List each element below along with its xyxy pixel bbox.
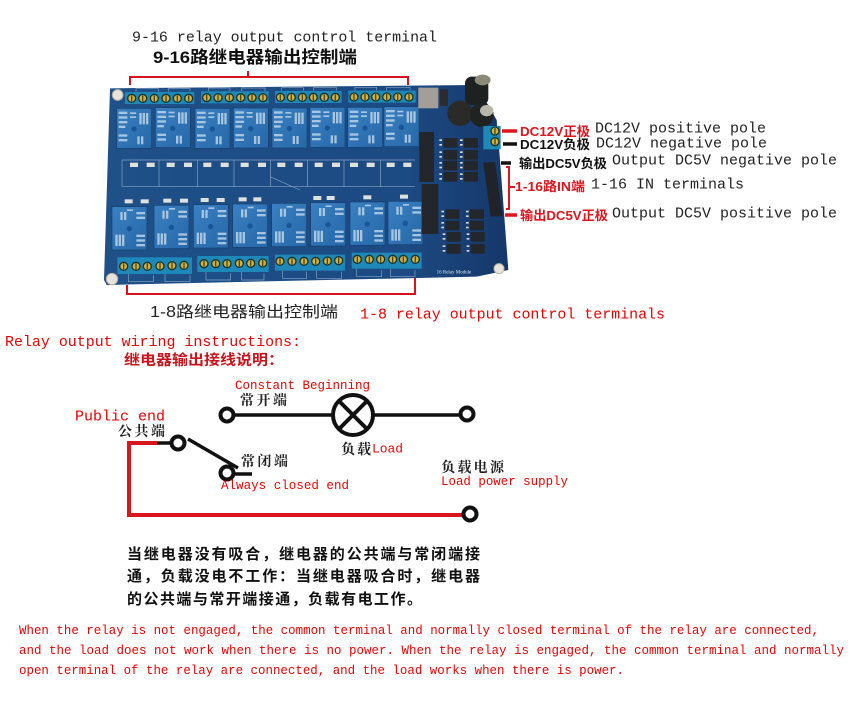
label: load power English: Load power supply bbox=[441, 474, 568, 489]
callouts: power and IN terminals bbox=[501, 120, 837, 223]
terminal: load right bbox=[460, 408, 474, 420]
driver chips bbox=[419, 132, 438, 234]
label: IN terminals English: 1-16 IN terminals bbox=[591, 176, 744, 194]
icon: lamp bbox=[333, 395, 373, 435]
terminal: normally closed bbox=[220, 466, 234, 480]
pads bbox=[125, 163, 411, 203]
label: constant beginning: Constant Beginning bbox=[235, 378, 370, 393]
USB header bbox=[418, 88, 448, 108]
heading: 9-16 Chinese: 9-16路继电器输出控制端 bbox=[153, 47, 357, 67]
label: DC12V negative Chinese: DC12V负极 bbox=[520, 137, 590, 152]
optocouplers bbox=[439, 138, 485, 254]
label: output DC5V negative Chinese: 输出DC5V负极 bbox=[519, 156, 607, 171]
heading: 9-16 English: 9-16 relay output control terminal bbox=[132, 30, 437, 46]
terminal: common bbox=[172, 436, 184, 450]
label: load power Chinese: 负载电源 bbox=[441, 459, 505, 476]
wire: power return bbox=[129, 443, 464, 515]
relay wiring diagram bbox=[75, 378, 568, 520]
label: common Chinese: 公共端 bbox=[118, 423, 165, 440]
text block: English explanation: open terminal of the relay are connected, and the load works when there is power. bbox=[19, 664, 624, 678]
terminal blocks: bottom bbox=[117, 253, 422, 274]
label: public end: Public end bbox=[75, 408, 165, 426]
terminal blocks: top bbox=[125, 91, 416, 104]
text block: Chinese explanation: 当继电器没有吸合，继电器的公共端与常闭端接 bbox=[127, 545, 480, 563]
bracket: 9-16 terminals bbox=[130, 71, 408, 85]
label: DC12V negative English: DC12V negative pole bbox=[596, 136, 767, 152]
bracket: 1-8 terminals bbox=[127, 278, 415, 294]
label: load Chinese: 负载 bbox=[341, 441, 372, 458]
label: normally open Chinese: 常开端 bbox=[240, 392, 287, 409]
relays: bottom row bbox=[112, 201, 423, 250]
text block: English explanation: and the load does not work when there is no power. When the relay is engaged, the common terminal and normally bbox=[19, 644, 844, 658]
text block: English explanation bbox=[19, 624, 844, 678]
label: normally closed Chinese: 常闭端 bbox=[241, 453, 288, 470]
wire: common stub bbox=[157, 441, 172, 445]
label: output DC5V negative English: Output DC5V negative pole bbox=[612, 152, 837, 170]
label: load English: Load bbox=[372, 442, 403, 456]
wire: normally closed stub bbox=[233, 472, 252, 476]
label: DC12V positive English: DC12V positive pole bbox=[595, 120, 766, 138]
switch arm bbox=[188, 439, 238, 468]
traces bbox=[122, 87, 415, 282]
panel: relay board photo bbox=[104, 75, 508, 285]
heading: 1-8 English: 1-8 relay output control terminals bbox=[360, 306, 665, 324]
mounting holes bbox=[106, 90, 504, 285]
heading: wiring instructions English: Relay output wiring instructions: bbox=[5, 334, 301, 351]
label: always closed end: Always closed end bbox=[221, 478, 349, 493]
pin header: IN terminals bbox=[483, 162, 503, 217]
heading: 1-8 Chinese: 1-8路继电器输出控制端 bbox=[150, 303, 338, 321]
text block: Chinese explanation bbox=[127, 545, 480, 608]
wire: load circuit bbox=[233, 413, 460, 417]
capacitors bbox=[447, 75, 494, 127]
terminal: normally open bbox=[220, 408, 234, 422]
text block: English explanation: When the relay is not engaged, the common terminal and normally closed terminal of the relay are connected, bbox=[19, 624, 819, 638]
board outline bbox=[104, 85, 508, 285]
label: output DC5V positive English: Output DC5V positive pole bbox=[612, 206, 837, 222]
terminal: load power bbox=[464, 508, 476, 520]
text block: Chinese explanation: 通，负载没电不工作：当继电器吸合时，继电器 bbox=[127, 567, 480, 585]
power terminal bbox=[483, 126, 501, 149]
label: IN terminals Chinese: 1-16路IN端 bbox=[515, 179, 585, 194]
module label: 16 Relay Module bbox=[437, 270, 472, 275]
label: DC12V positive Chinese: DC12V正极 bbox=[520, 124, 590, 139]
heading: wiring instructions Chinese: 继电器输出接线说明： bbox=[124, 351, 284, 369]
callout markers bbox=[502, 129, 517, 133]
relays: top row bbox=[117, 107, 419, 148]
label: output DC5V positive Chinese: 输出DC5V正极 bbox=[520, 208, 608, 223]
text block: Chinese explanation: 的公共端与常开端接通，负载有电工作。 bbox=[127, 590, 422, 608]
